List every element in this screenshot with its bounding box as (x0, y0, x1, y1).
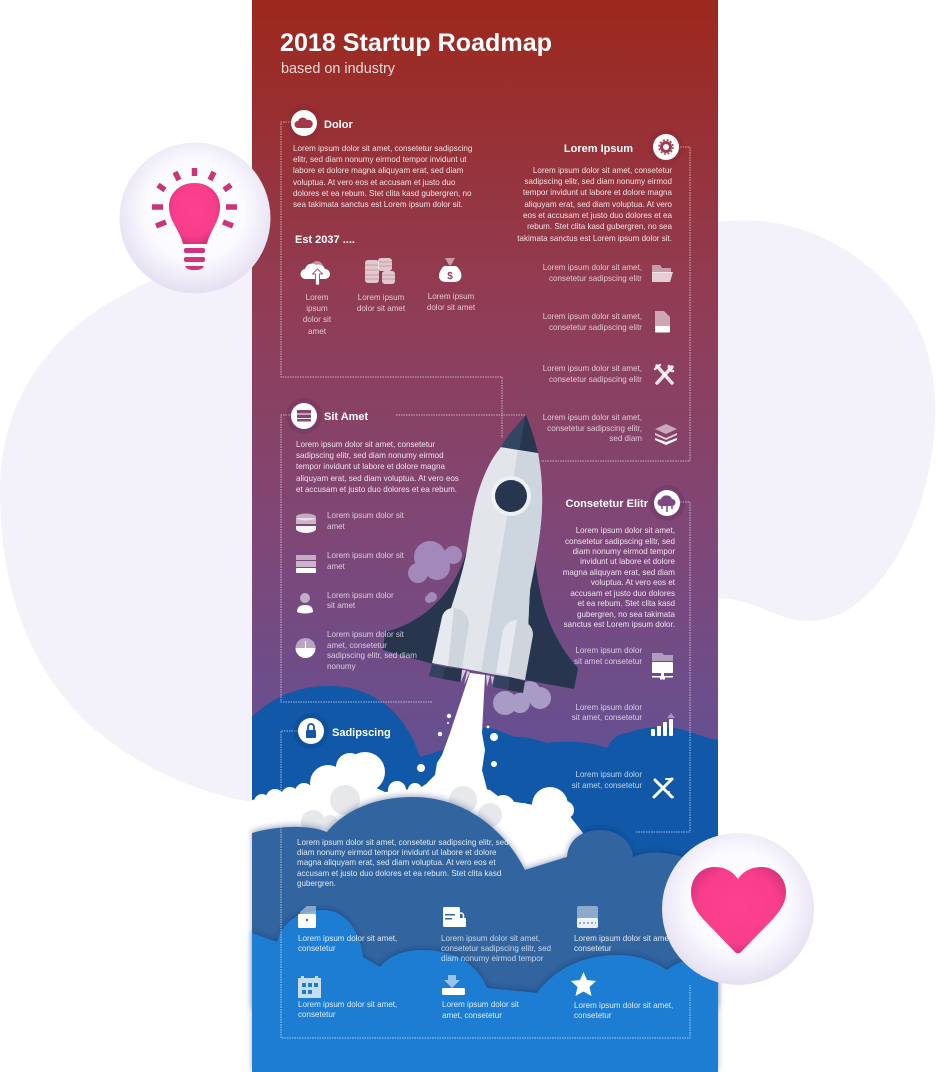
text: Lorem Ipsum paragraph: eos et accusam et justo duo dolores et ea (523, 211, 673, 220)
bulb rays (152, 168, 237, 226)
icon: coins (365, 258, 395, 284)
text: star item (574, 1001, 673, 1020)
text: document item (543, 312, 642, 332)
icon: server rack (296, 555, 316, 573)
heading: Sit Amet: Sit Amet (324, 411, 369, 423)
icon: cloud badge (286, 105, 322, 141)
text: Consetetur paragraph: diam nonumy eirmod tempor (573, 547, 675, 556)
text: clock item: amet, consetetur (327, 641, 387, 650)
text: folder item (543, 263, 642, 283)
text: money label: dolor sit amet (427, 303, 476, 312)
text: Sadipscing paragraph: diam nonumy eirmod tempor invidunt ut labore et dolore (297, 848, 497, 857)
text: Sadipscing paragraph: Lorem ipsum dolor sit amet, consetetur sadipscing elitr, sed (297, 838, 509, 847)
text: layers item (543, 413, 642, 443)
icon: heart orb (662, 833, 814, 985)
icon: lightbulb orb (120, 142, 270, 294)
text: cloud label (303, 293, 332, 336)
text: drawer item: Lorem ipsum dolor sit amet, (298, 934, 397, 943)
text: clock item: sadipscing elitr, sed diam (327, 651, 417, 660)
text: Dolor paragraph (293, 144, 472, 209)
text: wrench item: Lorem ipsum dolor (575, 770, 642, 779)
icon: lock badge (293, 713, 329, 749)
text: folder item: consetetur sadipscing elitr (549, 274, 642, 283)
text: download item (442, 1000, 520, 1020)
text: wrench item: sit amet, consetetur (572, 781, 642, 790)
text: Lorem Ipsum paragraph: aliquyam erat, sed diam voluptua. At vero (524, 200, 673, 209)
text: coins label: dolor sit amet (357, 304, 406, 313)
text: calendar item: consetetur (298, 1010, 336, 1019)
text: Consetetur paragraph: voluptua. At vero eos et (591, 578, 676, 587)
text: tray item: Lorem ipsum dolor sit amet, (574, 934, 673, 943)
text: document item: Lorem ipsum dolor sit amet, (441, 934, 540, 943)
text: download item: Lorem ipsum dolor sit (442, 1000, 520, 1009)
icon: crossed tools (654, 779, 673, 797)
icon: star (571, 972, 596, 996)
text: folder item: Lorem ipsum dolor sit amet, (543, 263, 642, 272)
text: document item (441, 934, 551, 963)
text: Dolor paragraph: voluptua. At vero eos et accusam et justo duo (293, 178, 456, 187)
icon: pie clock (296, 638, 316, 658)
panel: Consetetur Elitr (563, 485, 685, 797)
right fin (515, 555, 578, 689)
text: document item: diam nonumy eirmod tempor (441, 954, 544, 963)
text: user item: sit amet (327, 601, 356, 610)
icon: drawer (298, 906, 316, 928)
icon: cloud upload (300, 261, 330, 285)
white cloud (252, 752, 583, 870)
text: layers item: Lorem ipsum dolor sit amet, (543, 413, 642, 422)
text: drawer item (298, 934, 397, 953)
text: server item: Lorem ipsum dolor sit (327, 551, 405, 560)
left nozzle (429, 664, 462, 682)
text: tray item (574, 934, 673, 953)
icon: folder (652, 265, 673, 282)
text: Sadipscing paragraph: accusam et justo duo dolores et ea rebum. Stet clita kasd (297, 869, 501, 878)
icon: money bag: $ (447, 271, 453, 282)
text: layers item: consetetur sadipscing elitr, (547, 424, 642, 433)
panel: Lorem Ipsum (517, 129, 684, 445)
text: cloud label: amet (308, 327, 327, 336)
subtitle: based on industry (281, 61, 396, 77)
text: Consetetur paragraph: consetetur sadipscing elitr, sed (565, 537, 675, 546)
text: document item: consetetur sadipscing elitr, sed (441, 944, 551, 953)
rocket (383, 415, 578, 720)
icon: calendar (298, 976, 321, 998)
text: calendar item: Lorem ipsum dolor sit amet, (298, 1000, 397, 1009)
text: Lorem Ipsum paragraph: rebum. Stet clita kasd gubergren, no sea (527, 222, 673, 231)
icon: gear badge (648, 129, 684, 165)
text: star item: consetetur (574, 1011, 612, 1020)
text: Consetetur paragraph: magna aliquyam erat, sed diam (563, 568, 675, 577)
dashed connector lines (281, 122, 690, 1038)
text: money label (427, 292, 476, 312)
text: chart item: sit amet, consetetur (572, 713, 642, 722)
panel: Sit Amet (286, 398, 459, 671)
text: drawer item: consetetur (298, 944, 336, 953)
text: Sadipscing paragraph: magna aliquyam erat, sed diam voluptua. At vero eos et (297, 858, 496, 867)
text: Lorem Ipsum paragraph: sadipscing elitr, sed diam nonumy eirmod (524, 177, 672, 186)
text: download item: amet, consetetur (442, 1011, 502, 1020)
heading: Est 2037: Est 2037 .... (295, 234, 355, 246)
icon: layers (655, 424, 677, 445)
text: coins label: Lorem ipsum (358, 293, 405, 302)
text: Lorem Ipsum paragraph: takimata sanctus est Lorem ipsum dolor sit. (517, 234, 672, 243)
nose cone (501, 415, 538, 453)
text: database item (327, 511, 405, 531)
text: Consetetur paragraph: gubergren, no sea takimata (577, 610, 676, 619)
text: document item: Lorem ipsum dolor sit amet, (543, 312, 642, 321)
text: chart item (572, 703, 642, 722)
cloud layers (252, 673, 718, 1072)
flame streaks (461, 670, 494, 687)
text: Consetetur paragraph (563, 526, 676, 629)
icon: calendar tray (577, 906, 598, 928)
text: Lorem Ipsum paragraph: Lorem ipsum dolor sit amet, consetetur (533, 166, 672, 175)
text: Sit Amet paragraph: aliquyam erat, sed diam voluptua. At vero eos (296, 474, 459, 483)
text: calendar item (298, 1000, 397, 1019)
icon: tools (655, 365, 673, 383)
text: Sit Amet paragraph: sadipscing elitr, sed diam nonumy eirmod (296, 451, 444, 460)
text: network item (574, 646, 642, 666)
heading: Consetetur Elitr: Consetetur Elitr (565, 498, 649, 510)
text: cloud label: ipsum (306, 304, 328, 313)
mid cloud layer (252, 797, 718, 1010)
icon: database (296, 514, 316, 533)
text: Lorem Ipsum paragraph: tempor invidunt ut labore et dolore magna (523, 188, 673, 197)
icon: money bag (439, 258, 461, 282)
title (280, 29, 552, 77)
rocket exhaust smoke puff (493, 681, 551, 715)
rocket body shading (481, 450, 542, 680)
left fin (383, 545, 470, 664)
text: Dolor paragraph: labore et dolore magna aliquyam erat, sed diam (293, 166, 464, 175)
heart (691, 867, 786, 953)
text: Sit Amet paragraph: Lorem ipsum dolor sit amet, consetetur (296, 440, 435, 449)
lightbulb (169, 183, 220, 244)
text: Consetetur paragraph: sanctus est Lorem ipsum dolor. (564, 620, 675, 629)
text: database item: amet (327, 522, 346, 531)
text: cloud label: Lorem (306, 293, 329, 302)
text: tools item: Lorem ipsum dolor sit amet, (543, 364, 642, 373)
text: Dolor paragraph: sea takimata sanctus est Lorem ipsum dolor sit. (293, 200, 463, 209)
icon: user (297, 593, 313, 614)
heading: Dolor: Dolor (324, 119, 353, 131)
icon: document (655, 311, 670, 332)
title: 2018 Startup Roadmap (280, 29, 552, 57)
text: tools item: consetetur sadipscing elitr (549, 375, 642, 384)
text: Sit Amet paragraph: tempor invidunt ut labore et dolore magna (296, 462, 445, 471)
text: tray item: consetetur (574, 944, 612, 953)
flame jet (457, 673, 485, 720)
front cloud layer (252, 910, 718, 1072)
icon: secure document (443, 907, 466, 927)
bulb base (184, 248, 205, 270)
panel: Sadipscing (293, 713, 673, 1020)
icon: network folder (652, 653, 673, 680)
text: Sit Amet paragraph (296, 440, 459, 494)
text: wrench item (572, 770, 642, 790)
text: Sadipscing paragraph (297, 838, 509, 888)
text: Consetetur paragraph: accusam et justo duo dolores (570, 589, 675, 598)
cloud: dark blue back layer (252, 686, 718, 880)
right nozzle (493, 675, 525, 693)
text: server item: amet (327, 562, 346, 571)
text: Consetetur paragraph: Lorem ipsum dolor sit amet, (576, 526, 675, 535)
background blob (0, 220, 935, 802)
text: clock item: nonumy (327, 662, 356, 671)
rocket smoke puffs (408, 541, 462, 603)
text: Dolor paragraph: elitr, sed diam nonumy eirmod tempor invidunt ut (293, 155, 467, 164)
text: Sit Amet paragraph: et accusam et justo duo dolores et ea rebum. (296, 485, 457, 494)
text: tools item (543, 364, 642, 384)
heading: Lorem Ipsum: Lorem Ipsum (564, 143, 633, 155)
left booster (432, 608, 469, 668)
grey cloud shading (301, 785, 502, 834)
exhaust sparks (417, 714, 498, 772)
text: database item: Lorem ipsum dolor sit (327, 511, 405, 520)
text: chart item: Lorem ipsum dolor (575, 703, 642, 712)
text: Consetetur paragraph: invidunt ut labore et dolore (580, 557, 676, 566)
text: coins label (357, 293, 406, 313)
text: user item (327, 591, 394, 610)
text: clock item (327, 630, 417, 671)
icon: bar chart (651, 713, 675, 736)
text: user item: Lorem ipsum dolor (327, 591, 394, 600)
right booster (496, 620, 533, 680)
text: cloud label: dolor sit (303, 315, 332, 324)
text: money label: Lorem ipsum (428, 292, 475, 301)
text: Dolor paragraph: Lorem ipsum dolor sit amet, consetetur sadipscing (293, 144, 472, 153)
icon: cloud network badge (649, 485, 685, 521)
text: clock item: Lorem ipsum dolor sit (327, 630, 405, 639)
text: Consetetur paragraph: et ea rebum. Stet clita kasd (577, 599, 675, 608)
text: network item: sit amet consetetur (574, 657, 642, 666)
text: layers item: sed diam (609, 434, 642, 443)
poster background (252, 0, 718, 1072)
text: star item: Lorem ipsum dolor sit amet, (574, 1001, 673, 1010)
text: network item: Lorem ipsum dolor (575, 646, 642, 655)
icon: server badge (286, 398, 322, 434)
text: Dolor paragraph: dolores et ea rebum. Stet clita kasd gubergren, no (293, 189, 472, 198)
text: document item: consetetur sadipscing elitr (549, 323, 642, 332)
exhaust plume (427, 673, 503, 815)
text: Sadipscing paragraph: gubergren. (297, 879, 336, 888)
window (491, 476, 531, 516)
heading: Sadipscing: Sadipscing (332, 727, 391, 739)
text: Lorem Ipsum paragraph (517, 166, 673, 243)
rocket body (433, 447, 542, 680)
panel: Dolor (286, 105, 476, 336)
icon: download tray (442, 975, 465, 995)
text: server item (327, 551, 405, 571)
